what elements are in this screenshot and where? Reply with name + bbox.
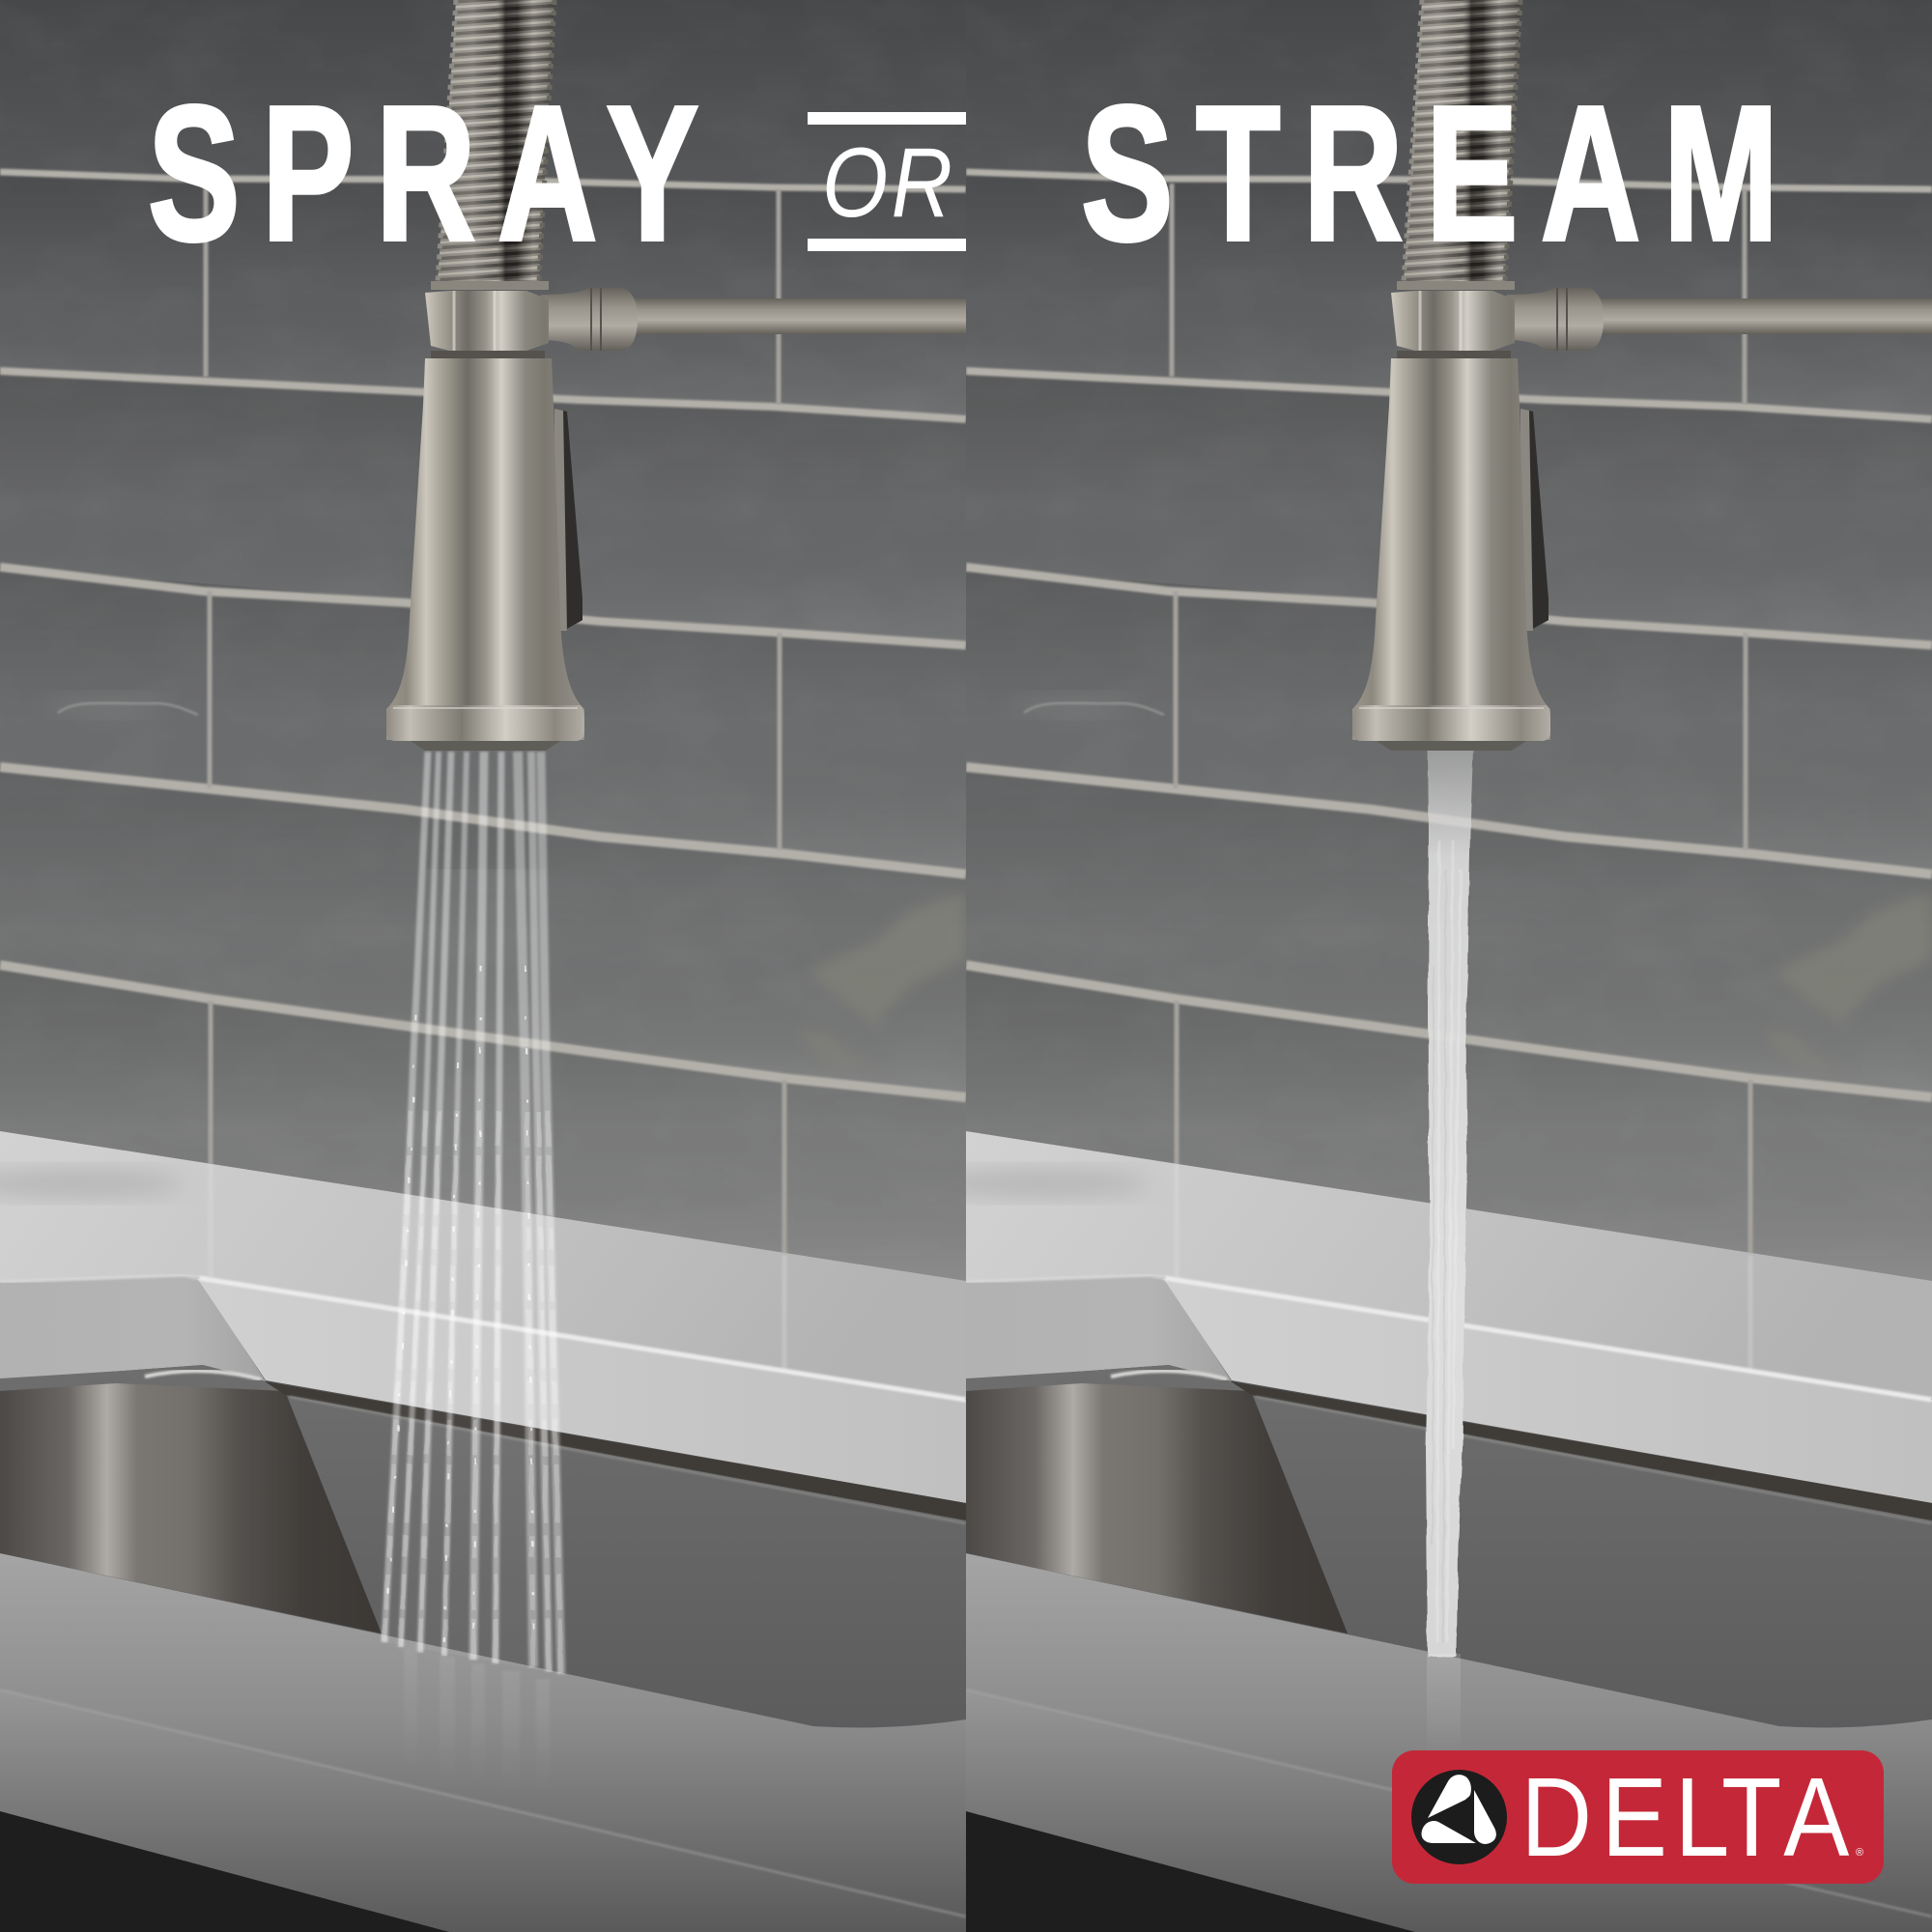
faucet sprayer head [1352, 0, 1932, 751]
faucet sprayer head [386, 0, 966, 751]
wordmark: DELTA [1520, 1755, 1849, 1880]
foreground countertop [0, 1553, 966, 1932]
stainless steel sink basin [966, 1365, 1932, 1734]
countertop back ledge and edge [0, 1131, 966, 1503]
stainless steel sink basin [0, 1365, 966, 1734]
subway tile wall [0, 0, 966, 1294]
subway tile wall [966, 0, 1932, 1294]
heading: OR with rules [808, 112, 966, 251]
icon: solid water stream [1426, 750, 1473, 1760]
panel: spray (left photo) [0, 0, 966, 1932]
registered mark: ® [1856, 1847, 1863, 1859]
heading: STREAM: STREAM [1081, 66, 1778, 280]
heading: SPRAY: SPRAY [148, 66, 698, 280]
countertop back ledge and edge [918, 1131, 1932, 1503]
logo: DELTA badge [1392, 1750, 1884, 1884]
panel: stream (right photo) [918, 0, 1932, 1932]
foreground countertop [966, 1553, 1932, 1932]
icon: Delta triangle mark [1411, 1770, 1507, 1864]
icon: spray water streams [384, 752, 562, 1797]
heading: OR with rules: OR [822, 128, 955, 239]
